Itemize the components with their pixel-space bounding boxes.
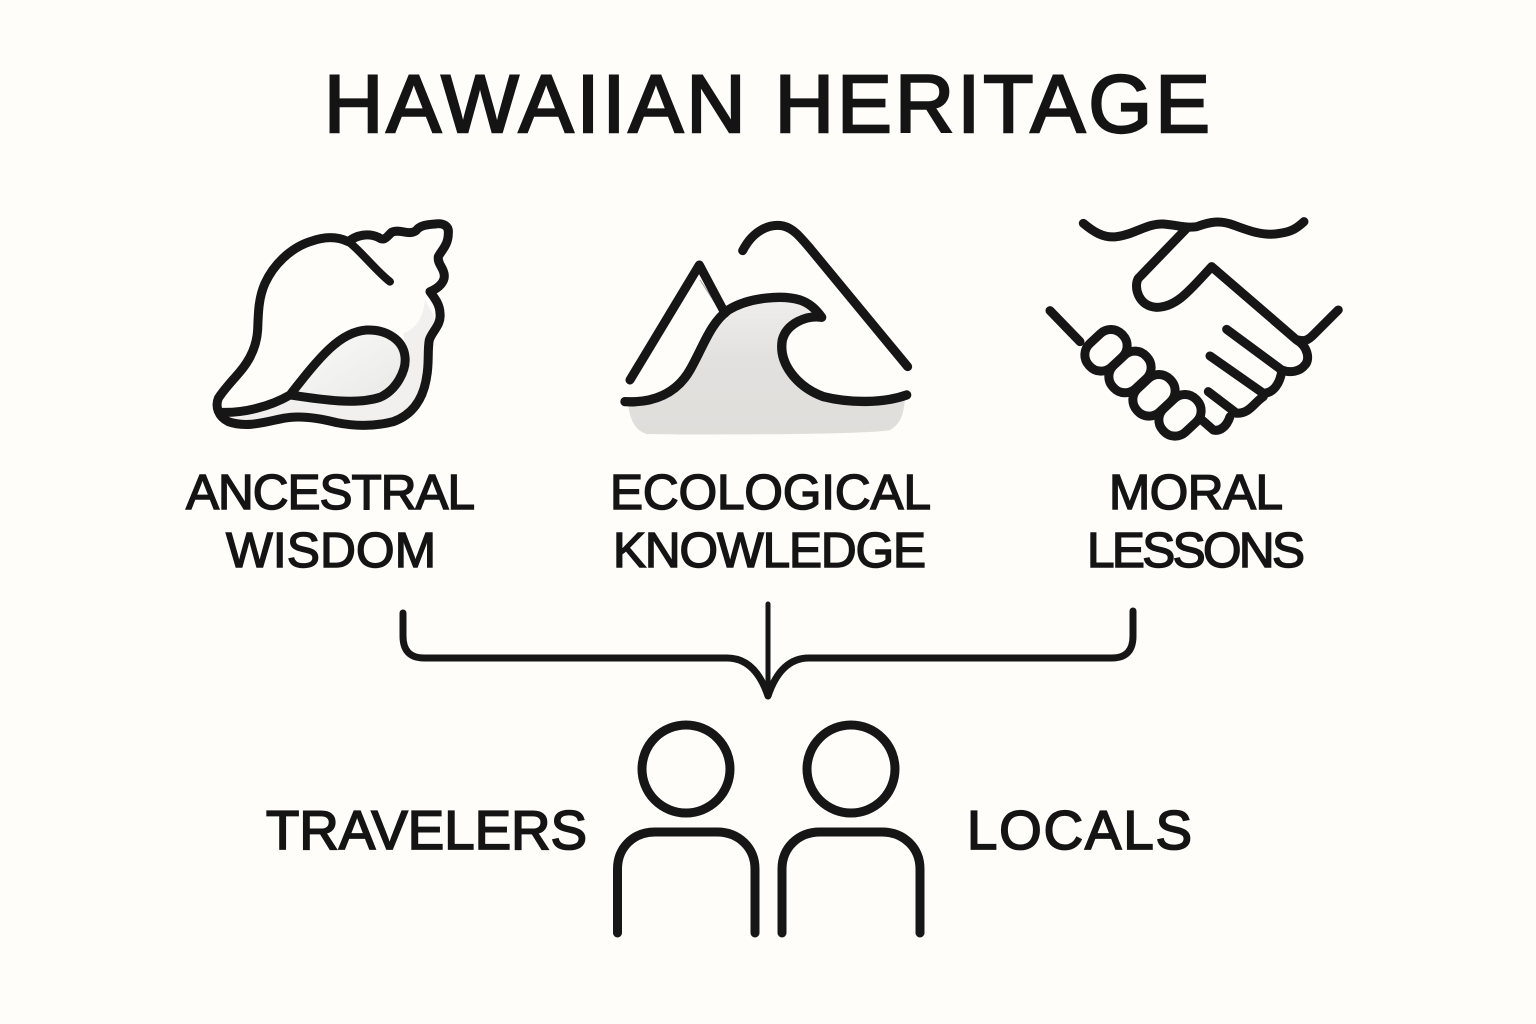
- label: ancestral wisdom: ANCESTRAL: [186, 465, 475, 520]
- label: ancestral wisdom: [186, 465, 475, 578]
- label: ecological knowledge: KNOWLEDGE: [613, 523, 926, 578]
- label: moral lessons: LESSONS: [1087, 523, 1305, 578]
- icon: person right: [782, 725, 920, 933]
- label: moral lessons: [1087, 465, 1305, 578]
- icon: person left: [618, 725, 755, 933]
- icon: handshake: [1050, 222, 1338, 442]
- label: ancestral wisdom: WISDOM: [226, 523, 436, 578]
- title: HAWAIIAN HERITAGE: [324, 59, 1210, 150]
- label: ecological knowledge: ECOLOGICAL: [610, 465, 931, 520]
- label: locals: LOCALS: [967, 800, 1192, 861]
- label: moral lessons: MORAL: [1109, 465, 1283, 520]
- label: travelers: TRAVELERS: [266, 800, 587, 861]
- bracket connector arrow: [403, 604, 1133, 696]
- icon: mountain and wave: [623, 225, 908, 434]
- label: ecological knowledge: [610, 465, 931, 578]
- icon: conch shell: [217, 224, 448, 425]
